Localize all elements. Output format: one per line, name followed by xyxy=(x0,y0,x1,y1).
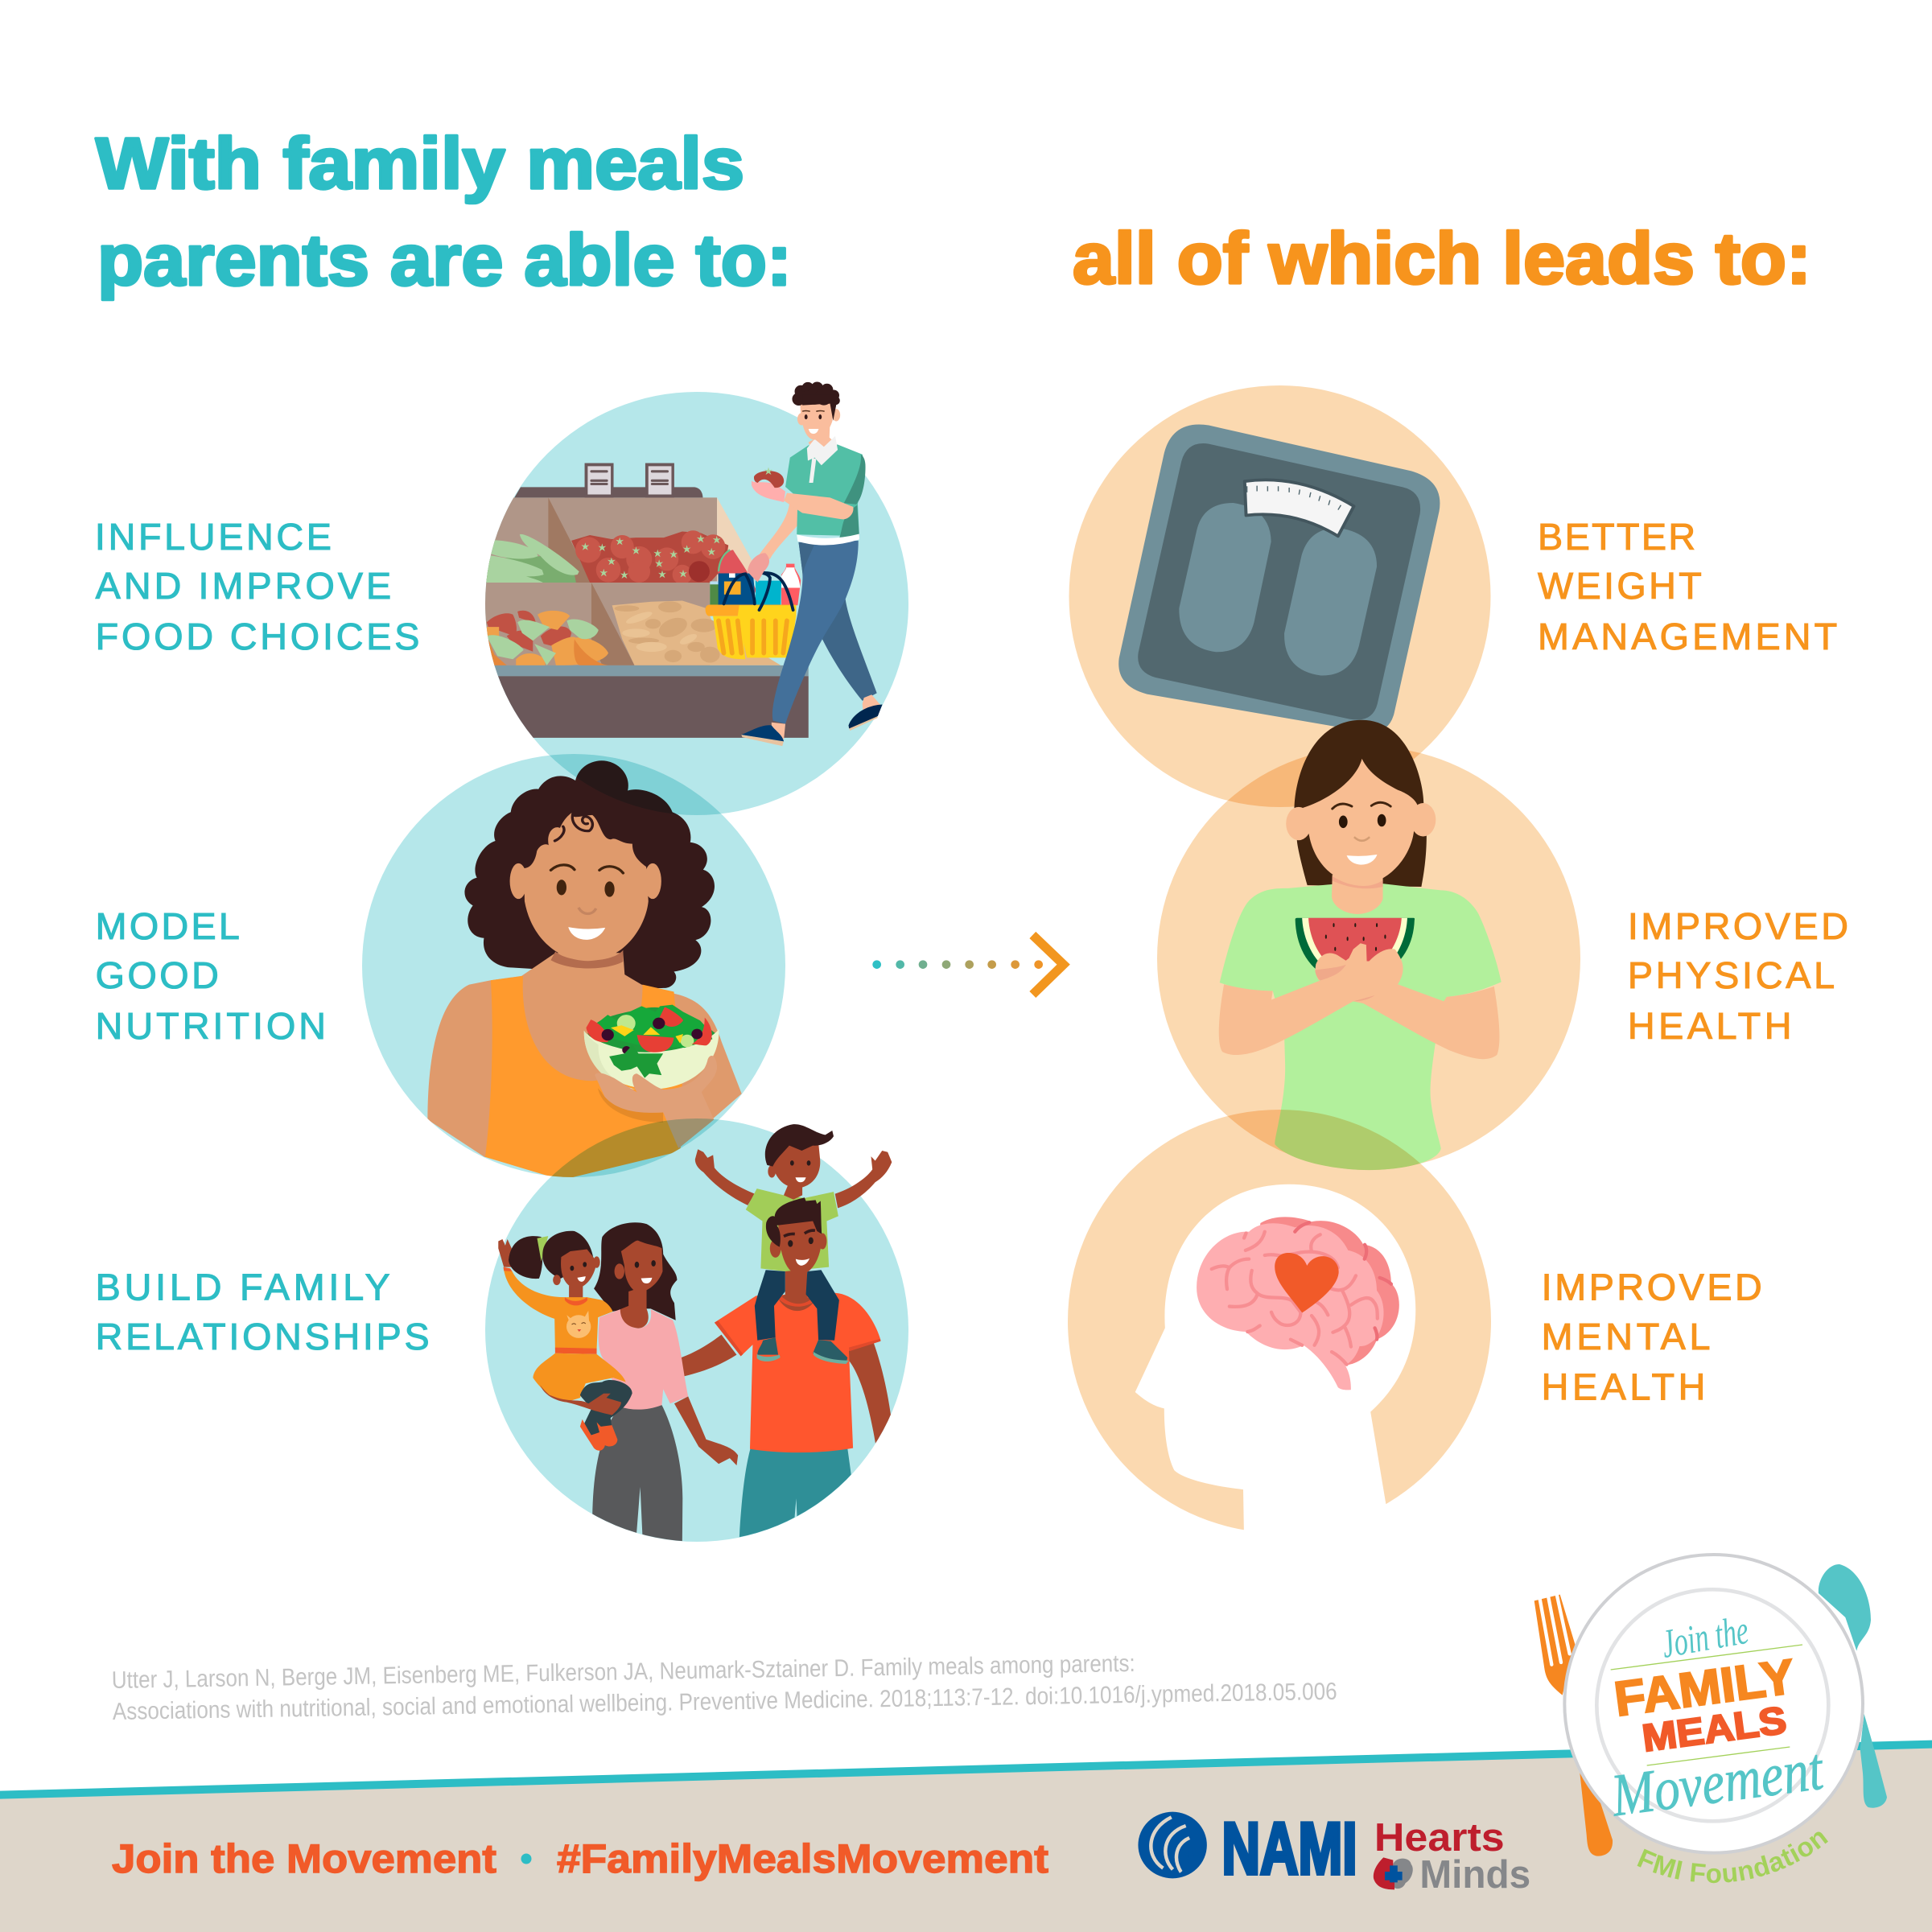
label: improved mental health: MENTAL xyxy=(1542,1316,1710,1357)
label: better weight management: MANAGEMENT xyxy=(1538,616,1837,657)
badge: family meals movement plate: FAMILY xyxy=(1611,1649,1798,1727)
illustration: family xyxy=(498,1124,896,1564)
potatoes xyxy=(612,601,781,665)
label: improved mental health: HEALTH xyxy=(1542,1366,1705,1408)
illustration: man with basket xyxy=(706,381,883,746)
label: influence and improve food choices: AND IMPROVE xyxy=(96,565,391,607)
man face xyxy=(770,1239,781,1258)
title: with family meals parents are able to: parents are able to: xyxy=(97,220,792,301)
girl legs xyxy=(580,1380,632,1438)
logo: NAMI Hearts and Minds: NAMI xyxy=(1221,1808,1357,1889)
illustration: woman holding salad bowl xyxy=(427,760,742,1180)
label: improved physical health: HEALTH xyxy=(1628,1005,1792,1047)
cucumbers xyxy=(485,556,576,583)
badge: family meals movement plate xyxy=(1563,1553,1864,1883)
label: improved physical health: IMPROVED xyxy=(1628,905,1848,947)
circle: family relationships background xyxy=(485,1118,908,1542)
girl xyxy=(498,1239,512,1267)
label: better weight management xyxy=(1538,516,1837,657)
label: improved mental health xyxy=(1542,1267,1762,1408)
illustration: head silhouette with brain and heart xyxy=(1135,1184,1415,1556)
illustration: produce display xyxy=(467,487,809,738)
footer: join the movement hashtag: Join the Movement xyxy=(112,1836,496,1881)
label: model good nutrition: NUTRITION xyxy=(96,1005,326,1047)
footer: join the movement hashtag: #FamilyMealsMovement xyxy=(557,1836,1048,1881)
boy xyxy=(695,1149,755,1205)
title: all of which leads to: all of which leads to: xyxy=(1073,219,1811,299)
badge: family meals movement plate: MEALS xyxy=(1640,1699,1789,1761)
woman hair xyxy=(594,1222,677,1320)
footer band xyxy=(0,1740,1932,1932)
illustration: woman with watermelon xyxy=(1219,720,1502,1170)
heart xyxy=(1275,1253,1339,1312)
logo: NAMI Hearts and Minds: Minds xyxy=(1419,1852,1530,1897)
arc text: FMI Foundation: FMI Foundation xyxy=(1637,1831,1828,1883)
circle: food choices background xyxy=(485,392,908,815)
label: better weight management: BETTER xyxy=(1538,516,1695,558)
label: improved physical health xyxy=(1628,905,1848,1047)
label: build family relationships xyxy=(96,1267,430,1357)
label: model good nutrition xyxy=(96,905,326,1047)
back leg and front leg xyxy=(822,593,877,701)
illustration: price signs xyxy=(585,463,674,497)
arrow: dotted arrow from actions to outcomes xyxy=(872,935,1064,995)
salad bowl xyxy=(584,1005,719,1123)
icon: orange fork xyxy=(1534,1592,1613,1856)
icon: teal spoon xyxy=(1819,1564,1887,1808)
circle: improved physical health background xyxy=(1157,747,1580,1170)
logo: NAMI Hearts and Minds: Hearts xyxy=(1374,1815,1505,1860)
circle: improved mental health background xyxy=(1068,1110,1491,1533)
man head xyxy=(792,381,840,483)
title: with family meals parents are able to: With family meals xyxy=(96,124,744,204)
man neck xyxy=(778,1260,814,1311)
label: improved mental health: IMPROVED xyxy=(1542,1267,1762,1308)
citation text: Associations with nutritional, social and emotional wellbeing. Preventive Medicine. 2018;113:7-12. doi:10.1016/j.ypmed.2018.05.006 xyxy=(113,1679,1337,1725)
citation text: Utter J, Larson N, Berge JM, Eisenberg ME, Fulkerson JA, Neumark-Sztainer D. Family meals among parents: xyxy=(112,1650,1135,1694)
circle: better weight management background xyxy=(1069,385,1490,807)
circle: model good nutrition background xyxy=(362,754,785,1177)
label: build family relationships: RELATIONSHIPS xyxy=(96,1316,430,1357)
hand under bowl xyxy=(595,1056,717,1148)
label: model good nutrition: GOOD xyxy=(96,954,219,996)
cat on dress xyxy=(566,1311,591,1338)
logo: NAMI Hearts and Minds xyxy=(1138,1808,1530,1897)
citation text xyxy=(112,1650,1337,1725)
label: better weight management: WEIGHT xyxy=(1538,565,1702,607)
watermelon xyxy=(1296,918,1415,978)
label: influence and improve food choices xyxy=(95,516,419,657)
label: influence and improve food choices: FOOD CHOICES xyxy=(96,616,419,657)
label: build family relationships: BUILD FAMILY xyxy=(96,1267,390,1308)
badge: family meals movement plate: Join the xyxy=(1658,1607,1752,1666)
label: influence and improve food choices: INFLUENCE xyxy=(95,516,332,558)
label: improved physical health: PHYSICAL xyxy=(1628,954,1835,996)
badge: family meals movement plate: Movement xyxy=(1607,1736,1828,1830)
scale dial xyxy=(1245,480,1353,536)
crossed arms xyxy=(1219,943,1499,1059)
footer: join the movement hashtag xyxy=(112,1836,1048,1881)
apples xyxy=(487,611,608,665)
illustration: bathroom scale xyxy=(1118,425,1440,732)
pants clipped to circle xyxy=(592,1344,891,1542)
title: with family meals parents are able to xyxy=(96,124,792,301)
label: model good nutrition: MODEL xyxy=(96,905,240,947)
